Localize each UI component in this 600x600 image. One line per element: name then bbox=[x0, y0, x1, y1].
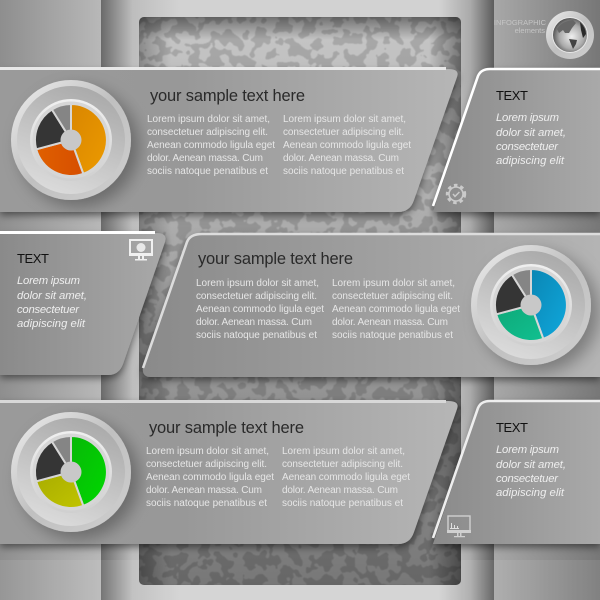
panel 1 text column 2: sociis natoque penatibus et bbox=[283, 166, 404, 177]
left card text: consectetuer bbox=[17, 304, 80, 316]
panel 3 text column 1: dolor. Aenean massa. Cum bbox=[146, 485, 262, 496]
pie chart 1 bbox=[35, 104, 107, 176]
panel 3 text column 1: Aenean commodo ligula eget bbox=[146, 472, 274, 483]
panel 1 text column 1: sociis natoque penatibus et bbox=[147, 166, 268, 177]
panel 3: main card bbox=[0, 400, 458, 544]
side card 3 text: adipiscing elit bbox=[496, 487, 565, 499]
panel 2 text column 1: consectetuer adipiscing elit. bbox=[196, 291, 317, 302]
panel 2 text column 1: Aenean commodo ligula eget bbox=[196, 304, 324, 315]
left card text: adipiscing elit bbox=[17, 318, 86, 330]
panel 3 side card bbox=[433, 401, 600, 544]
side card 3 text bbox=[496, 444, 566, 499]
panel 3 heading: your sample text here bbox=[149, 419, 304, 437]
side card 1 text: dolor sit amet, bbox=[496, 127, 566, 139]
panel 3 text column 2: Lorem ipsum dolor sit amet, bbox=[282, 446, 405, 457]
pie badge 2: blue bbox=[471, 245, 591, 365]
panel 1 text column 1: dolor. Aenean massa. Cum bbox=[147, 153, 263, 164]
side card 3 text: dolor sit amet, bbox=[496, 459, 566, 471]
panel 2 text column 2: dolor. Aenean massa. Cum bbox=[332, 317, 448, 328]
panel 2 text column 2: sociis natoque penatibus et bbox=[332, 330, 453, 341]
left card heading: TEXT bbox=[17, 251, 49, 266]
side card 1 text: consectetuer bbox=[496, 141, 559, 153]
panel 1 text column 2: Lorem ipsum dolor sit amet, bbox=[283, 114, 406, 125]
panel 2 heading: your sample text here bbox=[198, 250, 353, 268]
panel 3 text column 2: sociis natoque penatibus et bbox=[282, 498, 403, 509]
panel 2 text column 2: Lorem ipsum dolor sit amet, bbox=[332, 278, 455, 289]
side card 1 text: Lorem ipsum bbox=[496, 112, 559, 124]
panel 3 text column 2 bbox=[282, 446, 410, 509]
pie chart 2 bbox=[495, 269, 567, 341]
panel 1: main card bbox=[0, 67, 458, 212]
icon: gear with check bbox=[448, 186, 464, 202]
left card text: Lorem ipsum bbox=[17, 275, 80, 287]
panel 1 text column 2: Aenean commodo ligula eget bbox=[283, 140, 411, 151]
panel 1 side card bbox=[433, 69, 600, 212]
panel 1 text column 1: Lorem ipsum dolor sit amet, bbox=[147, 114, 270, 125]
panel 2 main card bbox=[143, 234, 600, 377]
logo text: INFOGRAPHIC bbox=[494, 18, 547, 27]
panel 2 text column 1: sociis natoque penatibus et bbox=[196, 330, 317, 341]
panel 3 text column 1: consectetuer adipiscing elit. bbox=[146, 459, 267, 470]
textured centre panel bbox=[139, 17, 461, 585]
panel 1 heading: your sample text here bbox=[150, 87, 305, 105]
icon: monitor with bars bbox=[447, 516, 471, 537]
pie badge 3: green bbox=[11, 412, 131, 532]
left card text bbox=[17, 275, 87, 330]
panel 1 text column 2: consectetuer adipiscing elit. bbox=[283, 127, 404, 138]
panel 3 text column 2: Aenean commodo ligula eget bbox=[282, 472, 410, 483]
side card 1 text: adipiscing elit bbox=[496, 155, 565, 167]
side card 1 text bbox=[496, 112, 566, 167]
panel 3 text column 1: Lorem ipsum dolor sit amet, bbox=[146, 446, 269, 457]
panel 2 text column 1: dolor. Aenean massa. Cum bbox=[196, 317, 312, 328]
panel 2 text column 1: Lorem ipsum dolor sit amet, bbox=[196, 278, 319, 289]
panel 1 text column 1: Aenean commodo ligula eget bbox=[147, 140, 275, 151]
side card 3 text: Lorem ipsum bbox=[496, 444, 559, 456]
panel 2 left card bbox=[0, 231, 166, 375]
panel 1 text column 1: consectetuer adipiscing elit. bbox=[147, 127, 268, 138]
logo text: elements bbox=[515, 26, 545, 35]
logo text bbox=[494, 18, 547, 35]
left card text: dolor sit amet, bbox=[17, 290, 87, 302]
icon: monitor with pie bbox=[129, 240, 153, 260]
side card 3 text: consectetuer bbox=[496, 473, 559, 485]
pie chart 3 bbox=[35, 436, 107, 508]
panel 3 text column 1: sociis natoque penatibus et bbox=[146, 498, 267, 509]
panel 3 text column 2: dolor. Aenean massa. Cum bbox=[282, 485, 398, 496]
panel 2 text column 2 bbox=[332, 278, 460, 341]
side card 3 heading: TEXT bbox=[496, 420, 528, 435]
panel 2 text column 2: consectetuer adipiscing elit. bbox=[332, 291, 453, 302]
panel 3 text column 1 bbox=[146, 446, 274, 509]
side card 1 heading: TEXT bbox=[496, 88, 528, 103]
pie badge 1: orange bbox=[11, 80, 131, 200]
panel 1 text column 1 bbox=[147, 114, 275, 177]
panel 1 text column 2: dolor. Aenean massa. Cum bbox=[283, 153, 399, 164]
icon: globe bbox=[546, 11, 594, 59]
panel 2 text column 1 bbox=[196, 278, 324, 341]
panel 2 text column 2: Aenean commodo ligula eget bbox=[332, 304, 460, 315]
panel 3 text column 2: consectetuer adipiscing elit. bbox=[282, 459, 403, 470]
panel 1 text column 2 bbox=[283, 114, 411, 177]
